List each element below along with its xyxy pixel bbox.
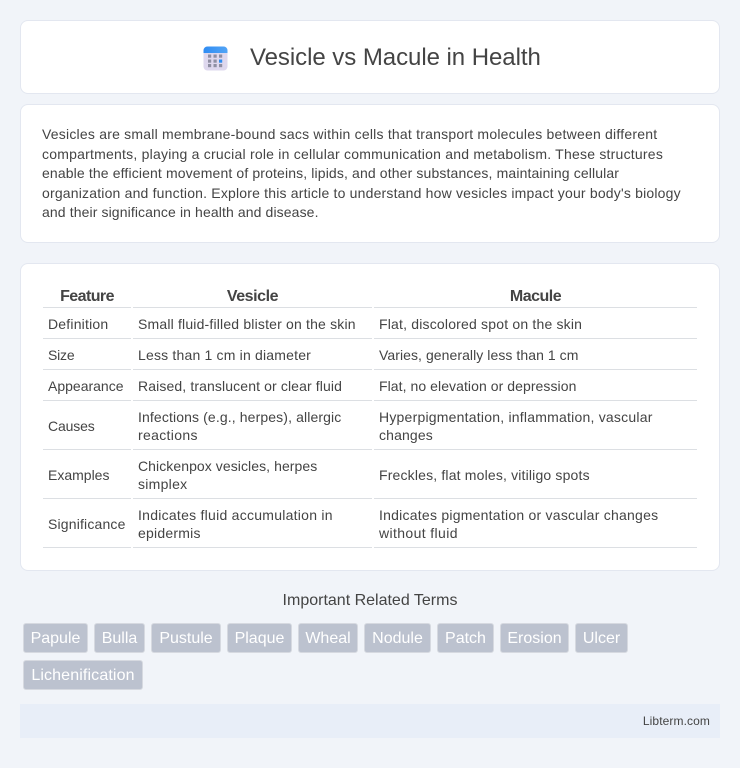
intro paragraph: Vesicles are small membrane-bound sacs within cells that transport molecules between different (42, 126, 657, 142)
row: appearance: Flat, no elevation or depression (379, 378, 576, 394)
related terms tags (23, 623, 628, 690)
tag: Wheal (298, 623, 358, 653)
row: appearance: Appearance (48, 378, 124, 394)
tag: Erosion: Erosion (507, 630, 562, 647)
tag: Pustule: Pustule (159, 630, 213, 647)
intro paragraph (42, 126, 681, 220)
row: causes: Hyperpigmentation, inflammation, vascular (379, 409, 653, 425)
tag: Lichenification: Lichenification (31, 667, 135, 684)
row: definition (43, 316, 697, 339)
row: significance: Indicates pigmentation or vascular changes (379, 507, 658, 523)
related terms heading: Important Related Terms (283, 592, 457, 609)
row: causes: Infections (e.g., herpes), allergic (138, 409, 341, 425)
intro paragraph: compartments, playing a crucial role in cellular communication and metabolism. These structures (42, 146, 663, 162)
footer bar (20, 704, 720, 738)
row: significance: without fluid (379, 525, 458, 541)
intro paragraph: enable the efficient movement of proteins, lipids, and other substances, maintaining cellular (42, 165, 619, 181)
row: causes: Causes (48, 418, 95, 434)
tag: Papule (23, 623, 88, 653)
table header: Vesicle (227, 288, 278, 305)
tag: Plaque: Plaque (235, 630, 284, 647)
intro paragraph: organization and function. Explore this article to understand how vesicles impact your body's biology (42, 185, 681, 201)
row: significance: Indicates fluid accumulation in (138, 507, 333, 523)
row: causes (43, 409, 697, 450)
row: examples (43, 458, 697, 499)
tag: Pustule (151, 623, 221, 653)
row: definition: Flat, discolored spot on the skin (379, 316, 582, 332)
tag: Ulcer: Ulcer (583, 630, 620, 647)
tag: Wheal: Wheal (305, 630, 351, 647)
row: significance: Significance (48, 516, 126, 532)
table header: Feature (60, 288, 114, 305)
tag: Erosion (500, 623, 569, 653)
header card (20, 20, 720, 94)
tag: Papule: Papule (31, 630, 80, 647)
row: significance (43, 507, 697, 548)
row: examples: Freckles, flat moles, vitiligo spots (379, 467, 590, 483)
row: appearance (43, 378, 697, 401)
tag: Nodule: Nodule (372, 630, 423, 647)
tag: Lichenification (23, 660, 143, 690)
title: Vesicle vs Macule in Health (250, 44, 541, 71)
tag: Plaque (227, 623, 292, 653)
row: size: Size (48, 347, 74, 363)
panel: comparison table (20, 263, 720, 571)
row: examples: Chickenpox vesicles, herpes (138, 458, 317, 474)
table header: Macule (510, 288, 561, 305)
row: definition: Definition (48, 316, 108, 332)
row: significance: epidermis (138, 525, 201, 541)
row: examples: simplex (138, 476, 187, 492)
row: size: Less than 1 cm in diameter (138, 347, 311, 363)
row: appearance: Raised, translucent or clear fluid (138, 378, 342, 394)
tag: Bulla (94, 623, 145, 653)
tag: Patch: Patch (445, 630, 486, 647)
tag: Patch (437, 623, 494, 653)
row: definition: Small fluid-filled blister on the skin (138, 316, 356, 332)
tag: Ulcer (575, 623, 628, 653)
intro paragraph: and their significance in health and disease. (42, 204, 319, 220)
row: size (43, 347, 697, 370)
tag: Bulla: Bulla (102, 630, 137, 647)
table header (43, 288, 697, 308)
row: causes: reactions (138, 427, 198, 443)
tag: Nodule (364, 623, 431, 653)
icon: calendar (204, 46, 228, 70)
row: causes: changes (379, 427, 433, 443)
footer credit: Libterm.com (643, 714, 710, 728)
row: examples: Examples (48, 467, 109, 483)
row: size: Varies, generally less than 1 cm (379, 347, 578, 363)
panel: intro text (20, 104, 720, 243)
